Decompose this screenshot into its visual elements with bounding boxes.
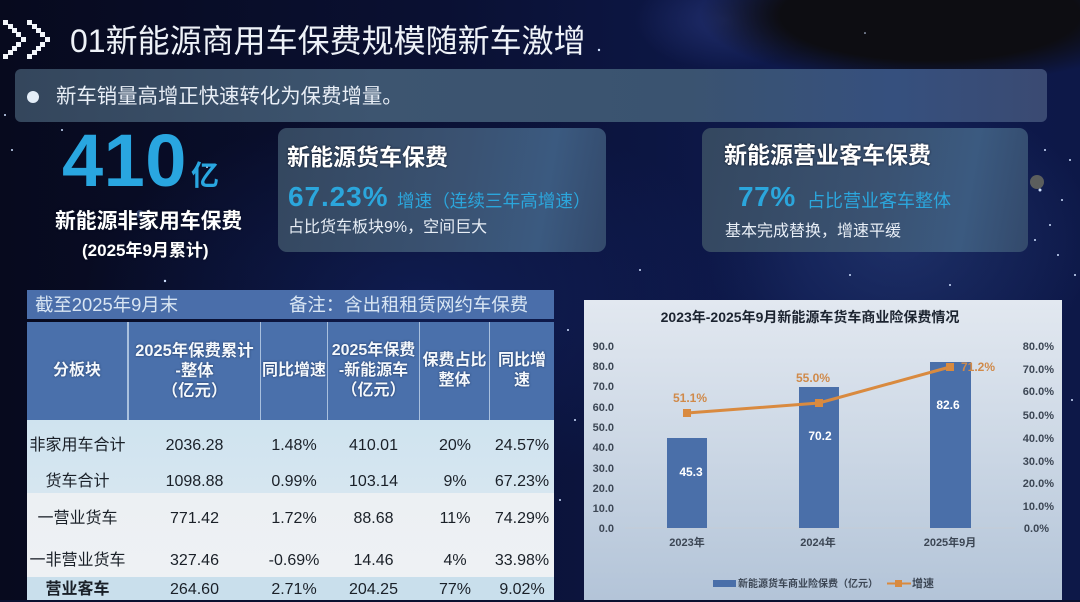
row: commercial passenger: 9.02% [499,581,545,598]
table header: 2025年保费累计 [135,342,254,360]
x axis labels [669,535,976,549]
share caption: 占比营业客车整体 [807,191,951,211]
right axis labels: 30.0% [1023,456,1054,468]
growth figure: 67.23% [288,181,388,212]
right axis labels: 80.0% [1023,341,1054,353]
table header: 保费占比 [422,352,486,369]
panel note: 占比货车板块9%，空间巨大 [288,219,487,236]
left axis labels: 70.0 [593,381,614,393]
table header: 速 [514,372,530,389]
table header: 整体 [438,372,470,389]
row: commercial truck: 771.42 [170,510,219,527]
row: non-private total: 1.48% [271,437,317,454]
row: truck total: 1098.88 [166,473,223,490]
panel note: 基本完成替换，增速平缓 [725,223,901,240]
row: non-private total: 410.01 [349,437,398,454]
row: commercial passenger: 营业客车 [45,581,110,598]
row: truck total: 67.23% [495,473,549,490]
row: commercial truck: 88.68 [353,510,394,527]
row: truck total [45,472,549,490]
axis line [625,527,1015,529]
left axis labels: 80.0 [593,361,614,373]
line value labels: 51.1% [673,391,707,405]
unit: 亿 [191,160,219,191]
row: non-private total: 20% [439,437,471,454]
left axis labels: 20.0 [593,483,614,495]
right axis labels: 40.0% [1023,433,1054,445]
table caption bar: 截至2025年9月末 [35,294,178,315]
growth caption: 增速（连续三年高增速） [397,191,591,211]
row: non-commercial truck: -0.69% [269,552,319,569]
table header: 同比增 [498,352,546,369]
icon: double pixel chevrons [3,20,50,59]
line value labels: 55.0% [796,371,830,385]
stat: 410亿 [55,119,242,260]
row: commercial truck: 11% [440,510,470,527]
row: truck total: 9% [443,473,467,490]
bar values: 82.6 [936,398,960,412]
chart title: 2023年-2025年9月新能源车货车商业险保费情况 [661,309,959,325]
row: commercial truck: 1.72% [271,510,317,527]
row: non-private total: 2036.28 [166,437,223,454]
table header: -新能源车 [339,362,408,379]
row: commercial truck: 一营业货车 [37,510,118,527]
left axis labels: 30.0 [593,463,614,475]
legend: 增速 [912,576,934,590]
legend [713,576,934,590]
right axis labels: 50.0% [1023,410,1054,422]
table header: -整体 [175,362,214,380]
x axis labels: 2025年9月 [924,535,976,549]
row: non-commercial truck: 327.46 [170,552,219,569]
bar values: 70.2 [808,429,832,443]
panel: truck premium [278,128,606,252]
table header: 分板块 [53,362,101,379]
bullet [27,91,39,103]
row: commercial passenger: 264.60 [170,581,219,598]
growth line [683,363,954,417]
table header: （亿元） [162,382,227,400]
table caption bar: 备注：含出租租赁网约车保费 [289,294,528,315]
table header: 2025年保费 [332,342,415,359]
left axis labels [593,341,614,535]
banner text: 新车销量高增正快速转化为保费增量。 [56,86,403,108]
left axis labels: 40.0 [593,442,614,454]
big number: 410 [62,119,187,202]
row: non-private total: 非家用车合计 [29,437,126,454]
right axis labels: 60.0% [1023,386,1054,398]
table caption bar [27,290,554,319]
row: non-private total [29,436,549,454]
line value labels [673,360,995,405]
panel heading: 新能源营业客车保费 [724,142,931,168]
row: truck total: 103.14 [349,473,398,490]
left axis labels: 90.0 [593,341,614,353]
right axis labels: 70.0% [1023,364,1054,376]
table panel [27,290,554,600]
row: non-commercial truck [29,551,549,569]
banner: key message [15,69,1047,122]
panel: commercial passenger premium [702,128,1028,252]
row: truck total: 0.99% [271,473,317,490]
right axis labels: 10.0% [1023,501,1054,513]
chart panel [584,300,1062,600]
table header: （亿元） [341,382,406,399]
left axis labels: 50.0 [593,422,614,434]
right axis labels [1023,341,1054,535]
row: non-commercial truck: 4% [443,552,467,569]
row: non-private total: 24.57% [495,437,549,454]
legend: 新能源货车商业险保费（亿元） [738,577,878,590]
left axis labels: 10.0 [593,503,614,515]
row: commercial truck [37,509,549,527]
stat label: 新能源非家用车保费 [55,210,242,233]
row: commercial truck: 74.29% [495,510,549,527]
row: commercial passenger [45,580,545,598]
x axis labels: 2023年 [669,535,705,549]
bars [667,362,971,528]
row: non-commercial truck: 33.98% [495,552,549,569]
row: non-commercial truck: 14.46 [353,552,394,569]
stat note: (2025年9月累计) [82,241,209,260]
row: commercial passenger: 204.25 [349,581,398,598]
line value labels: 71.2% [961,360,995,374]
bar values [679,398,960,479]
left axis labels: 0.0 [599,523,614,535]
right axis labels: 20.0% [1023,478,1054,490]
table body background [27,420,554,600]
panel heading: 新能源货车保费 [287,144,448,170]
row: commercial passenger: 2.71% [271,581,317,598]
row: non-commercial truck: 一非营业货车 [29,552,126,569]
row: truck total: 货车合计 [45,473,110,490]
left axis labels: 60.0 [593,402,614,414]
share figure: 77% [738,181,796,212]
x axis labels: 2024年 [800,535,836,549]
table header: 同比增速 [262,362,326,379]
title: 01新能源商用车保费规模随新车激增 [70,23,586,59]
row: commercial passenger: 77% [439,581,471,598]
right axis labels: 0.0% [1024,523,1049,535]
table header [27,322,554,420]
bar values: 45.3 [679,465,703,479]
